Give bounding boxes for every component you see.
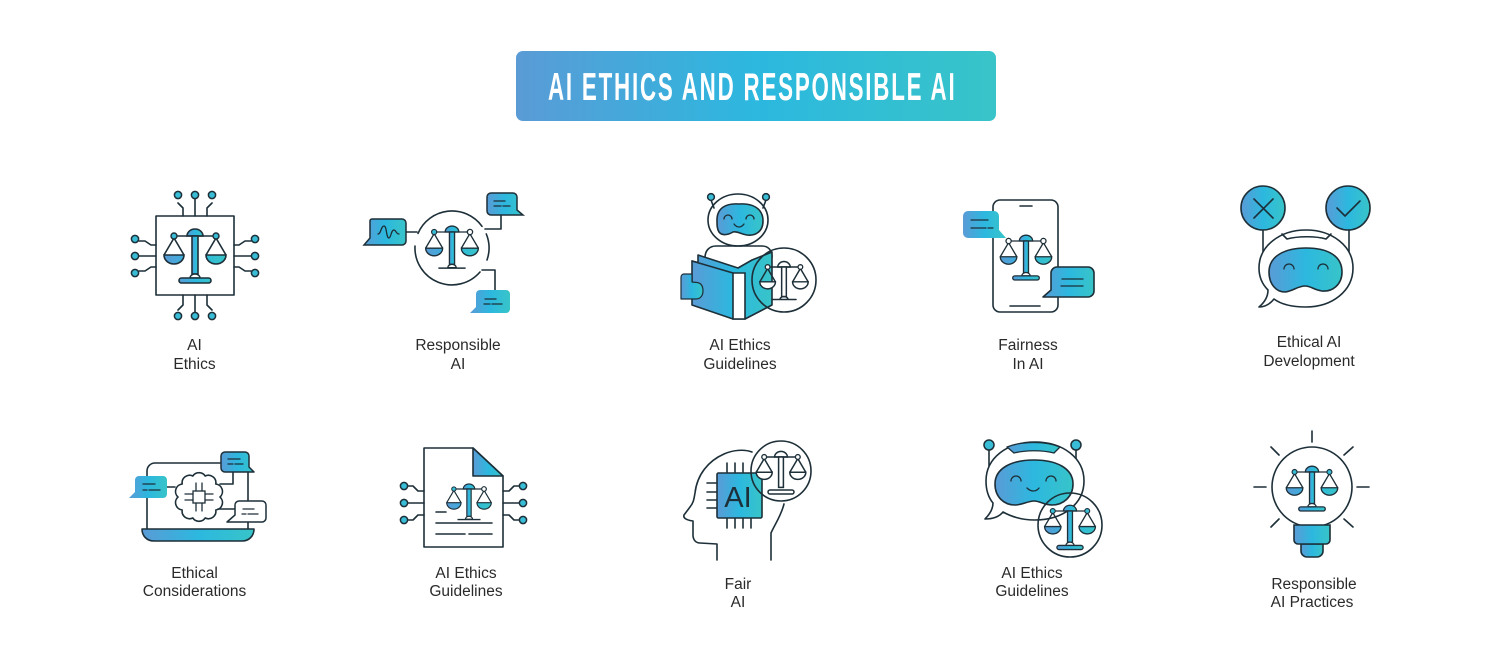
- icon: robot with cross and check choices: [1241, 186, 1370, 307]
- label: AI Ethics Guidelines: Guidelines: [429, 583, 503, 600]
- icon: robot speech bubble with scales: [984, 440, 1102, 557]
- title banner: [516, 51, 996, 121]
- label: AI Ethics Guidelines: AI Ethics: [1001, 565, 1063, 582]
- label: AI Ethics Guidelines: Guidelines: [995, 583, 1069, 600]
- icon: phone with scales and chat bubbles: [963, 200, 1094, 312]
- icon: laptop with brain chip and bubbles: [129, 452, 266, 541]
- icon: head with AI chip and scales: [684, 441, 811, 560]
- icon: responsible AI scales with speech bubbles: [364, 193, 523, 313]
- label: AI Ethics: Ethics: [173, 356, 216, 373]
- label: Fairness In AI: In AI: [1012, 356, 1044, 373]
- label: Fair AI: AI: [731, 594, 745, 611]
- label: Ethical AI Development: Ethical AI: [1277, 334, 1341, 351]
- icon: AI ethics chip with scales: [131, 191, 259, 320]
- label: AI Ethics: AI: [187, 337, 202, 354]
- label: Ethical Considerations: Considerations: [143, 583, 246, 600]
- icon: head with AI chip and scales: AI: [724, 482, 752, 514]
- label: Fairness In AI: Fairness: [998, 337, 1058, 354]
- icon: light bulb with scales: [1254, 431, 1369, 557]
- label: AI Ethics Guidelines: AI Ethics: [435, 565, 497, 582]
- label: Ethical AI Development: Development: [1263, 353, 1355, 370]
- icon: ethics document with circuit pins: [400, 448, 527, 547]
- label: Responsible AI: AI: [451, 356, 465, 373]
- label: Ethical Considerations: Ethical: [171, 565, 218, 582]
- label: Fair AI: Fair: [725, 576, 751, 593]
- label: Responsible AI Practices: AI Practices: [1271, 594, 1354, 611]
- icon: robot reading ethics book: [681, 194, 816, 319]
- label: Responsible AI: Responsible: [415, 337, 501, 354]
- title banner: AI ETHICS AND RESPONSIBLE AI: [548, 66, 956, 109]
- label: Responsible AI Practices: Responsible: [1271, 576, 1357, 593]
- label: AI Ethics Guidelines: Guidelines: [703, 356, 777, 373]
- label: AI Ethics Guidelines: AI Ethics: [709, 337, 771, 354]
